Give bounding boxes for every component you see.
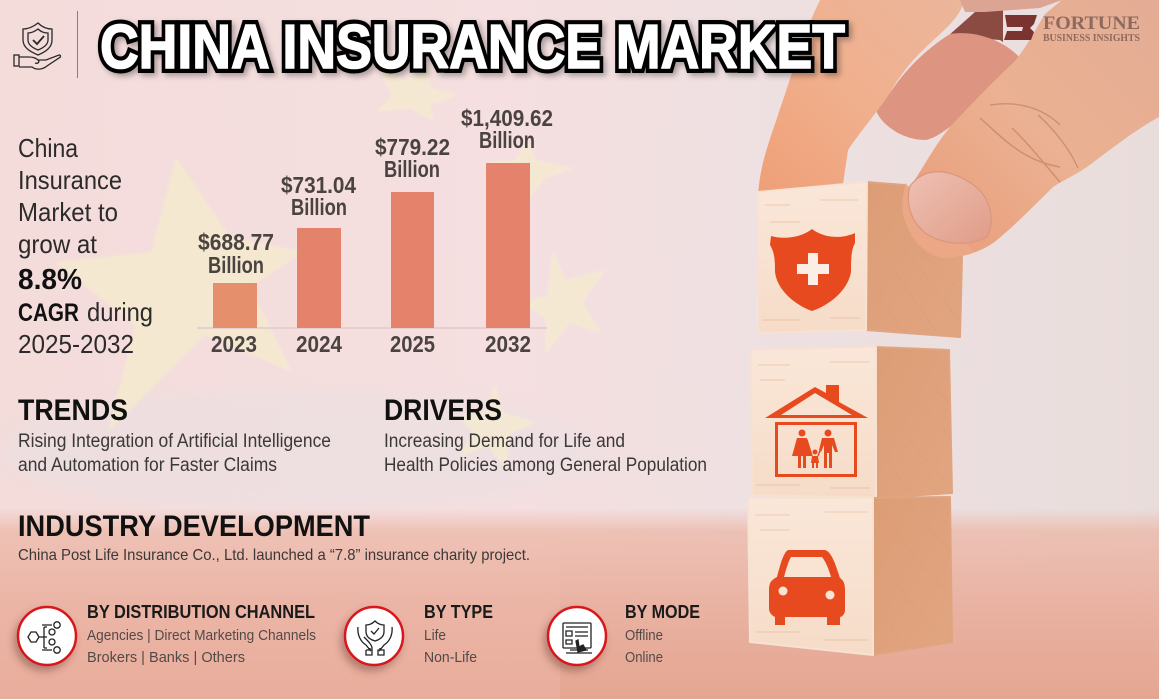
icon: online monitor (548, 607, 606, 665)
dark gap between fingers (948, 9, 1003, 42)
segment: distribution channel: BY DISTRIBUTION CHANNEL (87, 602, 315, 622)
growth statement: grow at (18, 229, 98, 259)
industry development: China Post Life Insurance Co., Ltd. launched a “7.8” insurance charity project. (18, 547, 530, 564)
icon: network (18, 607, 76, 665)
block: car (748, 497, 952, 655)
header icon: shield in hand (14, 23, 60, 69)
logo mark (1004, 15, 1037, 40)
drivers: DRIVERS (384, 394, 502, 427)
thumb wrinkles (980, 104, 1078, 182)
trends: and Automation for Faster Claims (18, 455, 277, 476)
bar 2032 (461, 105, 553, 357)
growth statement: during (87, 297, 153, 327)
growth statement: Market to (18, 197, 118, 227)
segment: type (345, 602, 493, 666)
segment: distribution channel: Brokers | Banks | Others (87, 649, 245, 666)
thumb overlap on block (902, 183, 975, 258)
block: house (751, 347, 952, 498)
segment: type: Non-Life (424, 649, 477, 666)
bar 2032: $1,409.62 (461, 105, 553, 131)
bar 2025 (375, 134, 450, 357)
growth statement: CAGR (18, 299, 79, 327)
bar 2023 (198, 229, 274, 357)
segment: mode: BY MODE (625, 602, 700, 622)
thumb nail (908, 172, 991, 243)
segment: distribution channel (18, 602, 316, 666)
bar 2023: 2023 (211, 331, 257, 357)
flag stars (55, 68, 606, 470)
icon: shield (770, 229, 855, 311)
industry development (18, 510, 530, 564)
hand (758, 0, 1159, 258)
icon: hands with shield (345, 607, 403, 665)
bar 2032: 2032 (485, 331, 531, 357)
segment: mode (548, 602, 700, 666)
bar 2023: Billion (208, 252, 264, 278)
growth statement: Insurance (18, 165, 122, 195)
bar 2024: $731.04 (281, 172, 356, 198)
index finger (758, 0, 965, 198)
bar 2025: $779.22 (375, 134, 450, 160)
segment: type: BY TYPE (424, 602, 493, 622)
growth statement (18, 133, 153, 359)
brand logo: FORTUNE (1043, 13, 1140, 34)
bar 2023: $688.77 (198, 229, 274, 255)
brand logo: BUSINESS INSIGHTS (1043, 33, 1140, 44)
industry development: INDUSTRY DEVELOPMENT (18, 510, 370, 543)
drivers: Health Policies among General Population (384, 455, 707, 476)
icon: car (769, 550, 845, 625)
segment: mode: Offline (625, 627, 663, 644)
brand logo (1004, 13, 1140, 44)
growth statement: 2025-2032 (18, 329, 134, 359)
bar chart (197, 105, 553, 357)
top knuckle skin (960, 0, 1062, 12)
middle finger (877, 33, 1022, 140)
growth statement: China (18, 133, 78, 163)
drivers: Increasing Demand for Life and (384, 431, 625, 452)
growth statement: 8.8% (18, 264, 82, 296)
bar 2025: Billion (384, 156, 440, 182)
bar 2032: Billion (479, 127, 535, 153)
thumb (903, 0, 1159, 258)
trends (18, 394, 331, 476)
bar 2025: 2025 (390, 331, 435, 357)
trends: TRENDS (18, 394, 128, 427)
segment: type: Life (424, 627, 446, 644)
segment: mode: Online (625, 649, 663, 666)
drivers (384, 394, 707, 476)
block: shield (758, 172, 991, 337)
icon: house and family (765, 385, 868, 477)
bar 2024: Billion (291, 194, 347, 220)
bar 2024: 2024 (296, 331, 342, 357)
bar 2024 (281, 172, 356, 357)
trends: Rising Integration of Artificial Intelligence (18, 431, 331, 452)
segment: distribution channel: Agencies | Direct Marketing Channels (87, 627, 316, 644)
title: CHINA INSURANCE MARKET (100, 13, 845, 82)
title: CHINA INSURANCE MARKET (100, 13, 845, 82)
header divider (77, 11, 78, 78)
